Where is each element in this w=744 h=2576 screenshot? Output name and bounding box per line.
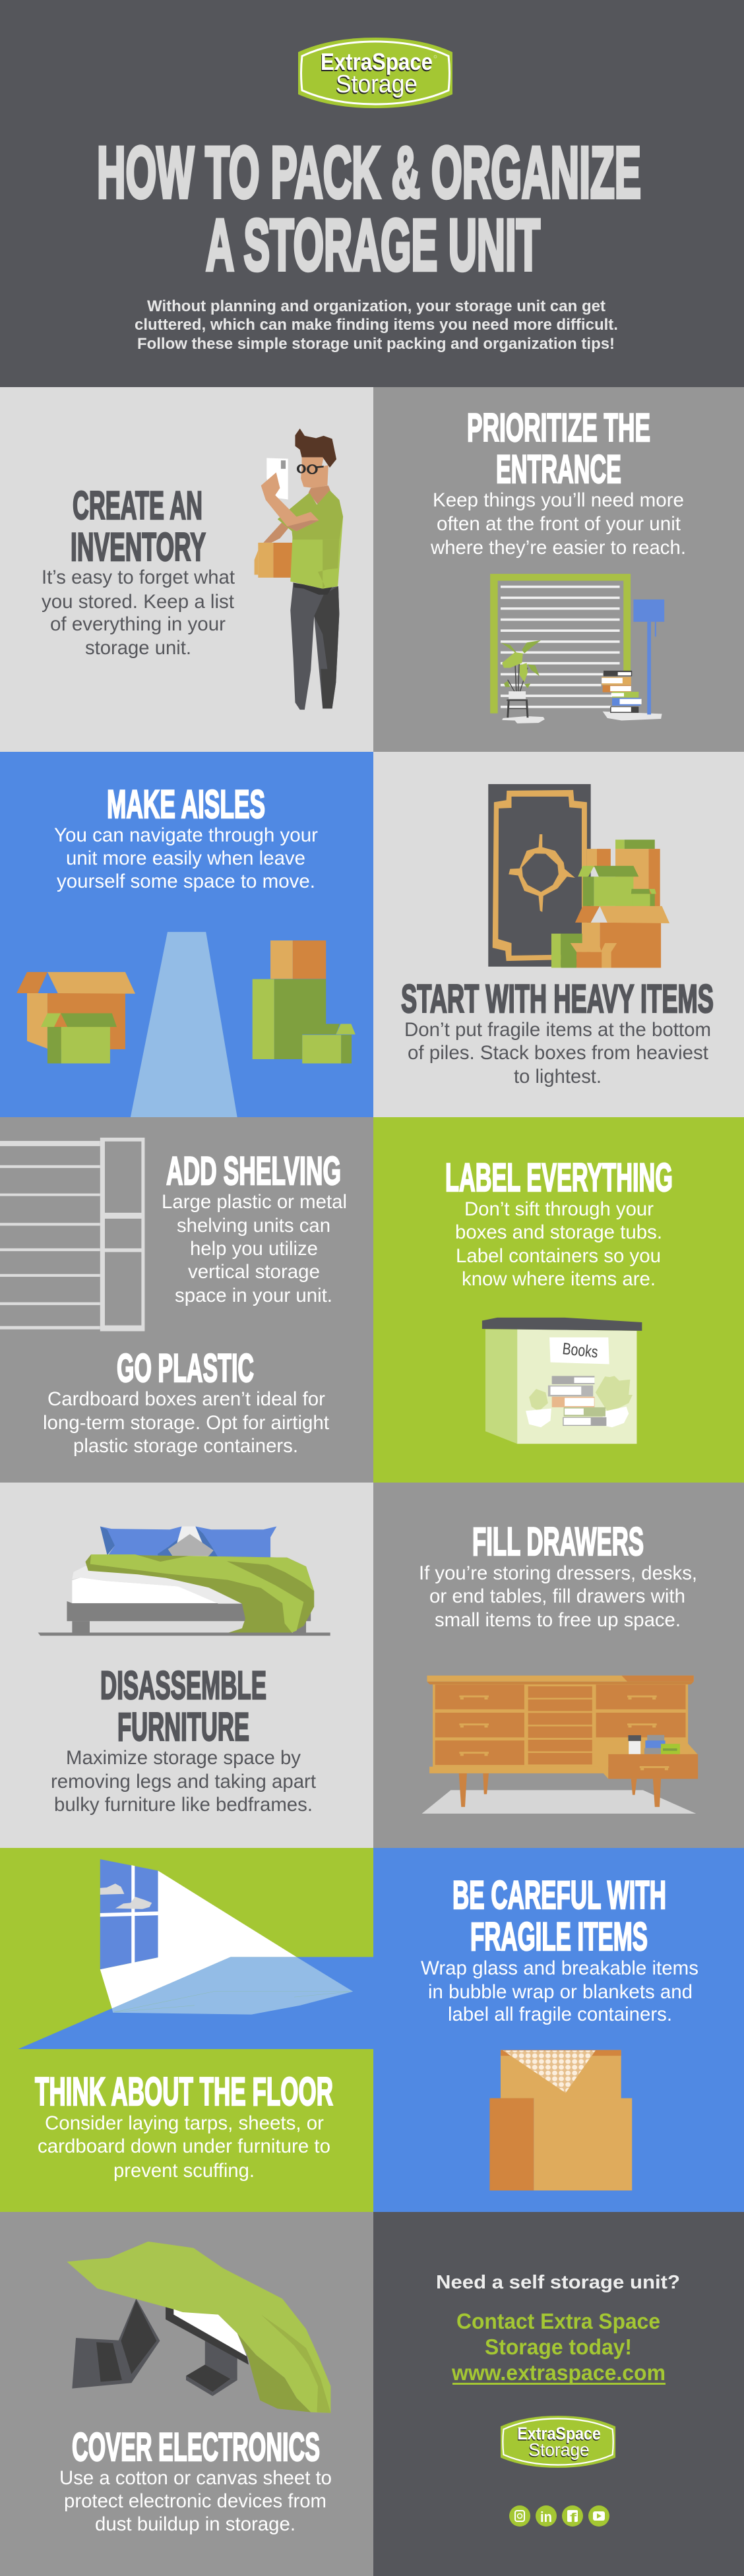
intro text: cluttered, which can make finding items you need more difficult. — [135, 316, 618, 334]
intro text: Follow these simple storage unit packing and organization tips! — [137, 335, 615, 353]
panel: add shelving and go plastic — [0, 1117, 373, 1483]
body text: add shelving — [162, 1191, 347, 1306]
icon: linkedin: in — [540, 2509, 552, 2525]
body text: think about the floor: cardboard down under furniture to — [38, 2135, 330, 2157]
illustration: electronics under a green cloth — [67, 2242, 330, 2413]
body text: start with heavy items — [404, 1019, 711, 1088]
panel: be careful with fragile items — [373, 1848, 744, 2212]
heading: think about the floor: THINK ABOUT THE FLOOR — [35, 2070, 333, 2114]
intro text — [135, 297, 618, 353]
logo: Extra Space Storage footer: Storage — [528, 2439, 590, 2460]
heading: go plastic: GO PLASTIC — [117, 1346, 254, 1390]
body text: be careful with fragile items: in bubble wrap or blankets and — [428, 1981, 693, 2003]
body text: add shelving: help you utilize — [190, 1238, 318, 1260]
illustration: man holding phone and box — [255, 429, 343, 710]
question text: Need a self storage unit? — [436, 2272, 680, 2293]
intro text: Without planning and organization, your storage unit can get — [147, 297, 605, 315]
body text: fill drawers — [419, 1562, 697, 1631]
body text: fill drawers: or end tables, fill drawers with — [429, 1585, 685, 1607]
body text: make aisles — [54, 824, 318, 892]
heading: disassemble furniture: FURNITURE — [117, 1705, 249, 1749]
body text: add shelving: shelving units can — [177, 1215, 330, 1237]
body text: create an inventory: of everything in your — [50, 613, 226, 635]
illustration: boxes on either side of an aisle — [16, 932, 356, 1117]
logo: Extra Space Storage: ExtraSpace — [321, 48, 433, 75]
body text: think about the floor: Consider laying tarps, sheets, or — [45, 2112, 324, 2134]
body text: cover electronics: Use a cotton or canvas sheet to — [59, 2467, 332, 2489]
social icons — [509, 2505, 609, 2527]
logo: Extra Space Storage: Storage — [335, 72, 417, 100]
contact text and link: www.extraspace.com — [451, 2360, 666, 2385]
body text: go plastic: Cardboard boxes aren’t ideal for — [47, 1388, 325, 1410]
body text: prioritize the entrance: Keep things you’ll need more — [433, 489, 684, 511]
body text: disassemble furniture: Maximize storage space by — [66, 1747, 301, 1769]
body text: label everything: Don’t sift through your — [464, 1198, 654, 1220]
heading: create an inventory — [71, 483, 206, 569]
panel: call to action — [373, 2212, 744, 2576]
body text: disassemble furniture: bulky furniture like bedframes. — [54, 1794, 313, 1816]
body text: make aisles: unit more easily when leave — [66, 847, 305, 869]
heading: cover electronics: COVER ELECTRONICS — [72, 2425, 320, 2469]
body text: label everything: know where items are. — [462, 1268, 656, 1290]
panel: cover electronics — [0, 2212, 373, 2576]
body text: go plastic — [43, 1388, 330, 1457]
body text: label everything: boxes and storage tubs. — [455, 1221, 662, 1243]
body text: fill drawers: small items to free up space. — [435, 1609, 681, 1631]
heading: add shelving: ADD SHELVING — [166, 1149, 341, 1193]
logo: Extra Space Storage footer: Storage — [528, 2441, 589, 2461]
illustration: dresser with open drawer — [422, 1676, 698, 1814]
heading: create an inventory: CREATE AN — [73, 483, 202, 528]
body text: fill drawers: If you’re storing dressers, desks, — [419, 1562, 697, 1584]
body text: create an inventory: storage unit. — [85, 637, 191, 659]
body text: be careful with fragile items: label all fragile containers. — [448, 2004, 672, 2025]
body text: create an inventory: It’s easy to forget what — [42, 567, 235, 588]
logo: Extra Space Storage footer — [501, 2416, 615, 2468]
heading: disassemble furniture: DISASSEMBLE — [100, 1663, 266, 1707]
body text: start with heavy items: of piles. Stack boxes from heaviest — [408, 1042, 709, 1064]
panel: think about the floor — [0, 1848, 373, 2212]
logo: Extra Space Storage footer: ExtraSpace — [517, 2424, 601, 2443]
illustration: boxes with bubble wrap — [489, 2050, 632, 2190]
tub label text: Books — [561, 1339, 599, 1362]
body text: disassemble furniture: removing legs and taking apart — [51, 1771, 317, 1793]
body text: start with heavy items: to lightest. — [514, 1066, 602, 1088]
logo: Extra Space Storage: Storage — [336, 71, 418, 98]
panel: disassemble furniture — [0, 1483, 373, 1848]
icon: linkedin — [536, 2505, 557, 2527]
illustration: shelving unit — [0, 1138, 144, 1332]
body text: disassemble furniture — [51, 1747, 317, 1816]
body text: be careful with fragile items — [421, 1957, 698, 2025]
body text: add shelving: space in your unit. — [175, 1285, 332, 1306]
logo: Extra Space Storage — [298, 38, 452, 108]
icon: facebook: f — [570, 2511, 577, 2525]
body text: add shelving: Large plastic or metal — [162, 1191, 347, 1213]
illustration: bed with blanket — [38, 1527, 330, 1636]
logo: Extra Space Storage: ExtraSpace — [320, 49, 432, 77]
panel: header — [0, 0, 744, 387]
illustration: labeled storage tub — [482, 1318, 642, 1444]
logo: Extra Space Storage footer: ExtraSpace — [517, 2425, 600, 2445]
panel: fill drawers — [373, 1483, 744, 1848]
body text: cover electronics: protect electronic devices from — [64, 2490, 326, 2512]
panel: label everything — [373, 1117, 744, 1483]
contact text and link: Storage today! — [485, 2335, 632, 2359]
body text: make aisles: You can navigate through your — [54, 824, 318, 846]
contact text and link: Contact Extra Space — [456, 2309, 660, 2333]
heading: prioritize the entrance — [467, 406, 650, 491]
icon: instagram — [509, 2505, 530, 2527]
body text: label everything: Label containers so you — [456, 1245, 661, 1267]
body text: add shelving: vertical storage — [188, 1261, 320, 1283]
panel: prioritize the entrance — [373, 387, 744, 752]
contact text and link — [451, 2309, 666, 2385]
illustration: roll-up door, plant, books and lamp — [490, 574, 664, 723]
body text: make aisles: yourself some space to move. — [57, 871, 315, 892]
panel: make aisles — [0, 752, 373, 1117]
body text: go plastic: long-term storage. Opt for airtight — [43, 1412, 330, 1434]
body text: label everything — [455, 1198, 662, 1290]
heading: disassemble furniture — [100, 1663, 266, 1749]
body text: think about the floor: prevent scuffing. — [113, 2160, 255, 2182]
heading: prioritize the entrance: ENTRANCE — [496, 447, 621, 491]
title — [97, 132, 641, 286]
body text: prioritize the entrance — [430, 489, 686, 559]
body text: cover electronics — [59, 2467, 332, 2535]
body text: start with heavy items: Don’t put fragile items at the bottom — [404, 1019, 711, 1041]
body text: cover electronics: dust buildup in storage. — [95, 2513, 295, 2535]
body text: prioritize the entrance: where they’re easier to reach. — [430, 537, 686, 559]
heading: create an inventory: INVENTORY — [71, 525, 206, 569]
body text: prioritize the entrance: often at the front of your unit — [437, 513, 681, 535]
body text: be careful with fragile items: Wrap glass and breakable items — [421, 1957, 698, 1979]
body text: create an inventory — [42, 567, 235, 659]
illustration: framed mirror and stacked boxes — [488, 784, 669, 967]
heading: be careful with fragile items — [452, 1873, 666, 1959]
panel: start with heavy items — [373, 752, 744, 1117]
body text: create an inventory: you stored. Keep a list — [42, 591, 235, 613]
illustration: window and light on the floor — [18, 1859, 373, 2049]
body text: think about the floor — [38, 2112, 330, 2182]
icon: facebook — [562, 2505, 583, 2527]
body text: go plastic: plastic storage containers. — [73, 1435, 298, 1457]
panel: create an inventory — [0, 387, 373, 752]
heading: make aisles: MAKE AISLES — [107, 782, 265, 826]
icon: youtube — [588, 2505, 609, 2527]
